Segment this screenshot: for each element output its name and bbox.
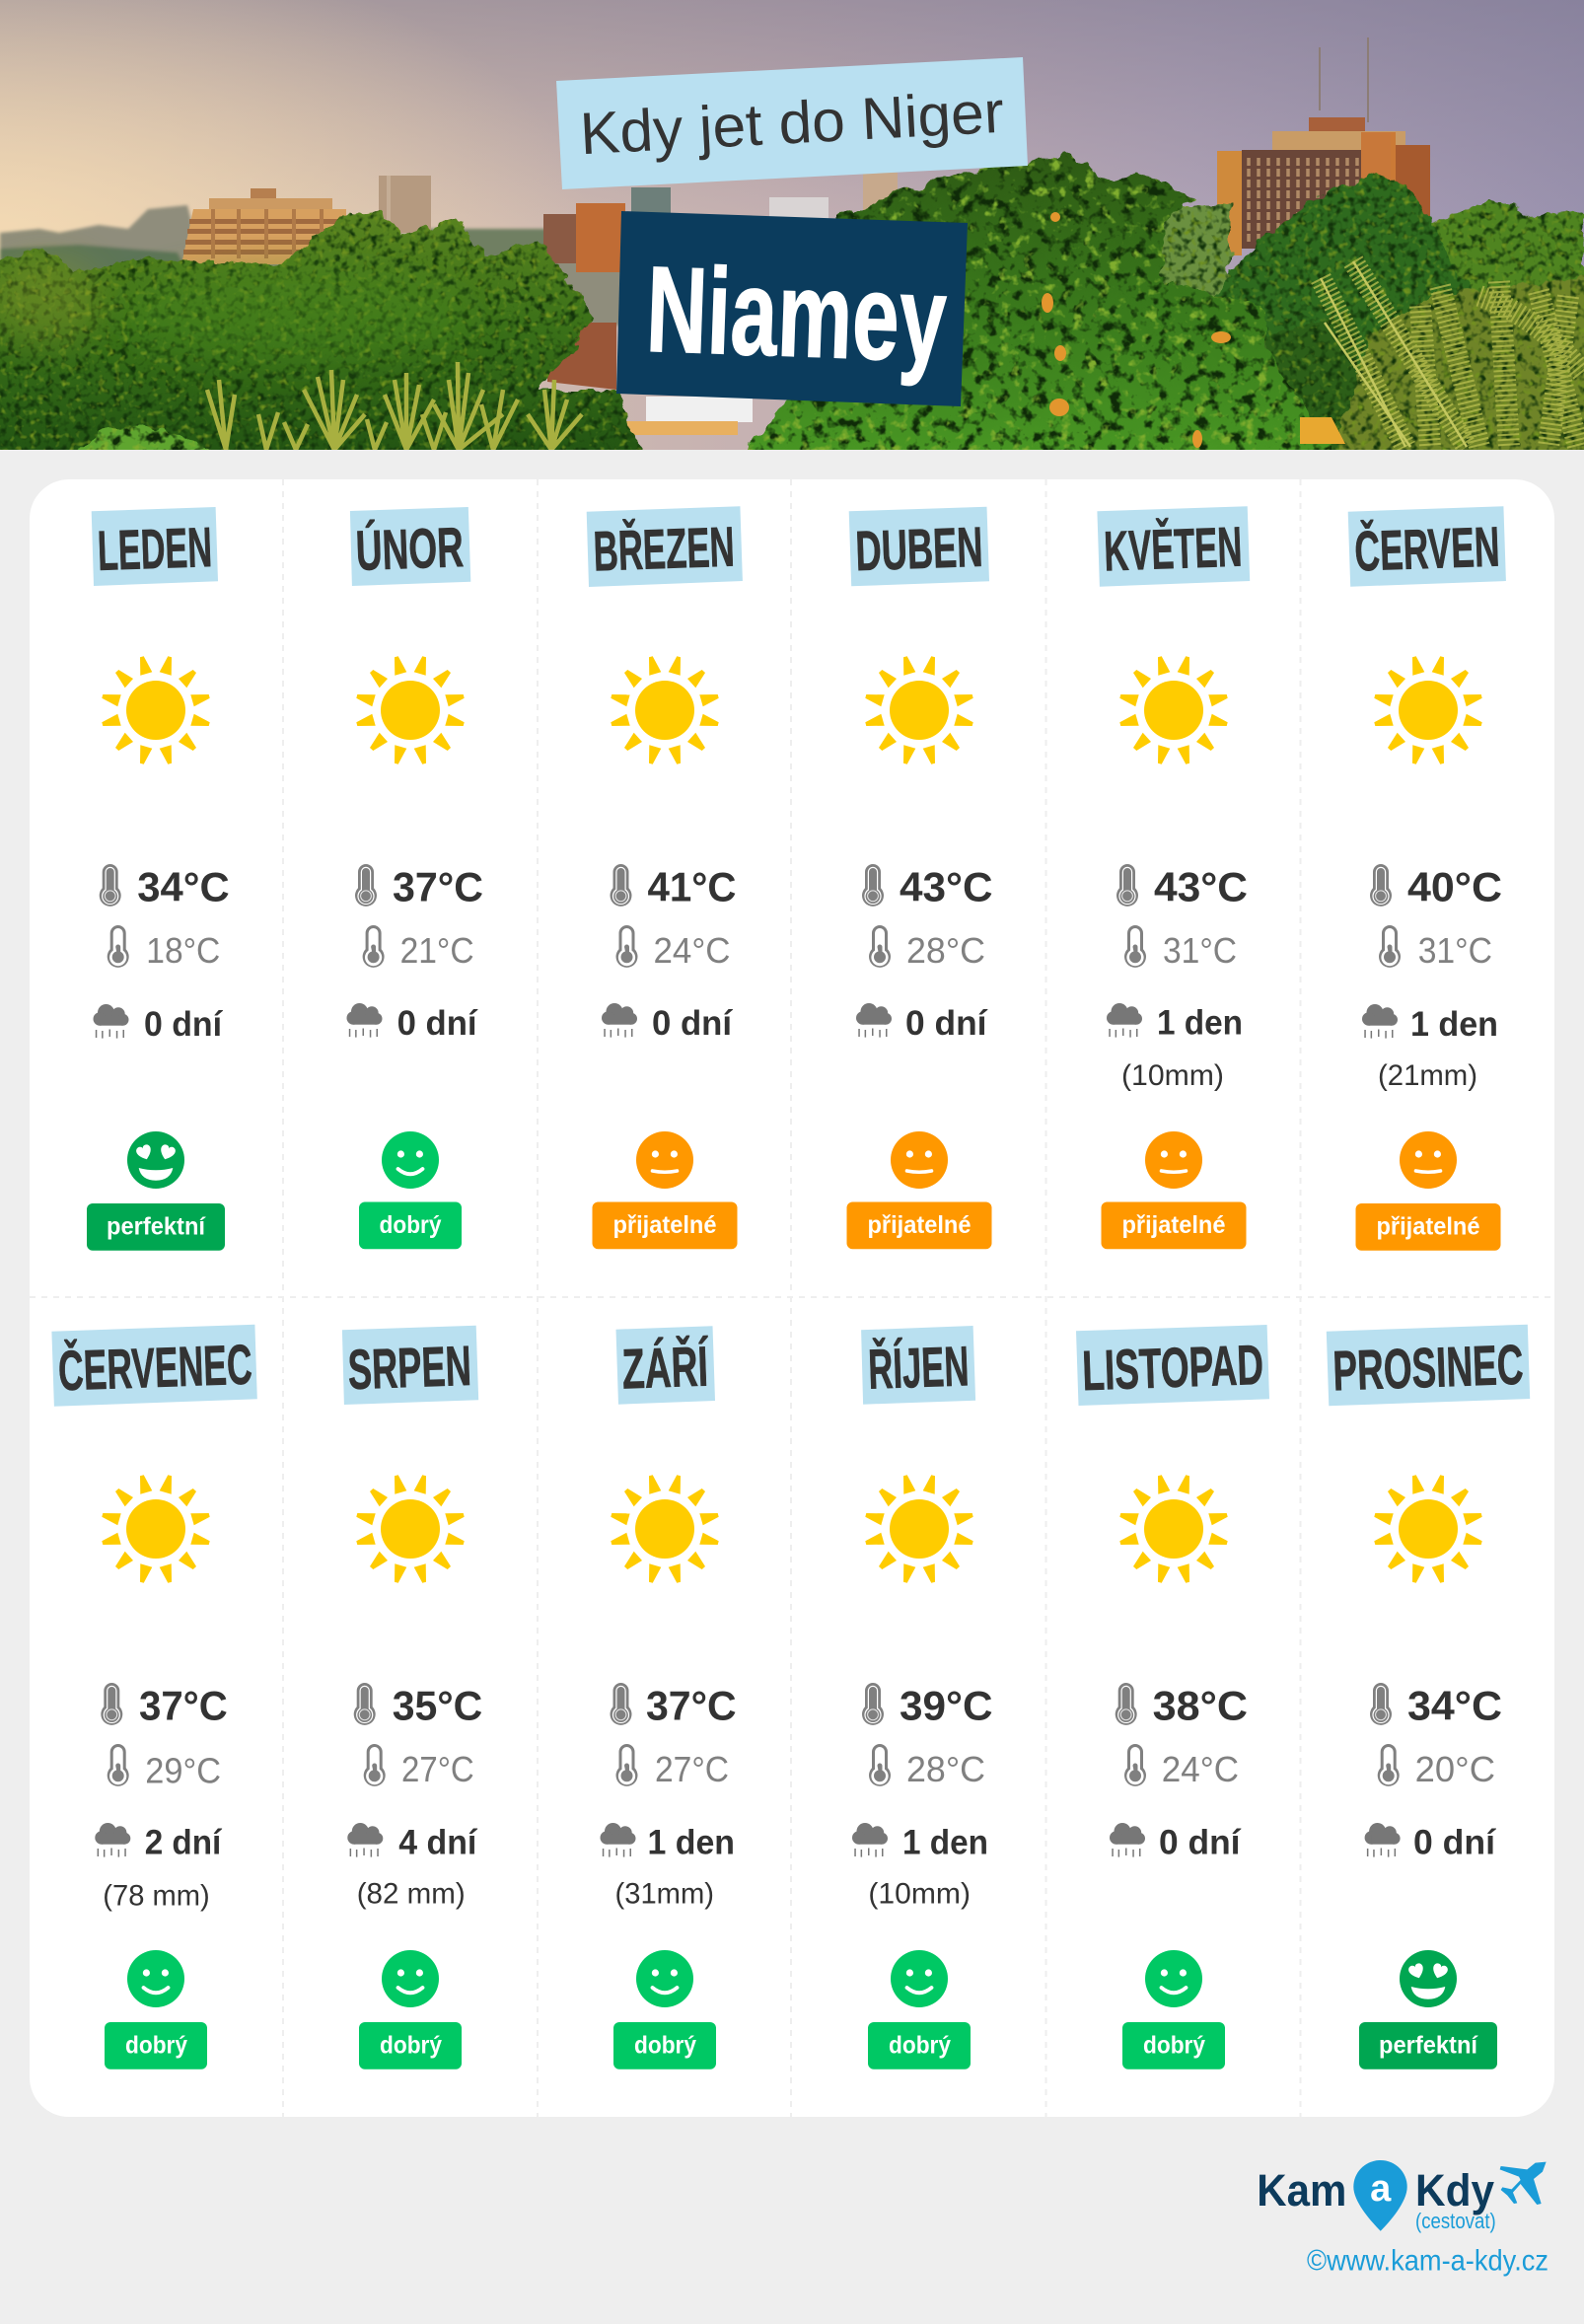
high temperature: 34°C <box>137 863 230 909</box>
rain days: 0 dní <box>905 1004 988 1043</box>
icon: airplane <box>1500 2162 1547 2205</box>
month: září <box>600 1326 737 2070</box>
low temperature <box>1124 925 1237 971</box>
low temperature: 24°C <box>1162 1749 1239 1789</box>
rain days: 0 dní <box>397 1004 478 1043</box>
low temperature <box>363 925 474 971</box>
low temperature: 28°C <box>906 930 985 971</box>
rain days <box>1107 1003 1243 1042</box>
rating: perfektní: perfektní <box>1379 2032 1478 2060</box>
label: listopad: LISTOPAD <box>1081 1334 1264 1403</box>
logo: Kam a Kdy: (cestovat) <box>1415 2209 1496 2233</box>
subtitle banner <box>556 57 1028 189</box>
month: únor <box>347 507 483 1249</box>
label: květen: KVĚTEN <box>1103 515 1243 583</box>
high temperature: 34°C <box>1407 1682 1502 1728</box>
rain days: 0 dní <box>144 1005 223 1044</box>
month: říjen <box>852 1326 992 2070</box>
label: červenec: ČERVENEC <box>57 1333 253 1403</box>
label: listopad <box>1076 1325 1269 1406</box>
label: říjen: ŘÍJEN <box>867 1334 970 1402</box>
rating: perfektní <box>1359 1950 1497 2070</box>
low temperature: 24°C <box>653 930 730 971</box>
rating: dobrý <box>105 1950 207 2070</box>
icon: sun <box>1119 656 1228 764</box>
rain days <box>347 1823 478 1862</box>
rain days <box>856 1003 988 1043</box>
rain amount: (78 mm) <box>103 1880 210 1913</box>
label: leden: LEDEN <box>97 516 213 583</box>
rating: dobrý: dobrý <box>125 2032 187 2060</box>
rain days <box>95 1823 222 1862</box>
high temperature: 38°C <box>1153 1682 1248 1728</box>
high temperature: 41°C <box>647 863 736 909</box>
high temperature: 37°C <box>139 1682 228 1728</box>
label: září <box>615 1326 715 1405</box>
month: červenec <box>51 1325 257 2070</box>
rain days: 2 dní <box>145 1823 222 1862</box>
low temperature: 31°C <box>1163 930 1237 971</box>
rain days: 0 dní <box>652 1004 733 1043</box>
month: leden <box>87 507 230 1251</box>
rain days: 1 den <box>647 1823 735 1862</box>
logo: Kam a Kdy <box>1257 2160 1547 2233</box>
month: prosinec <box>1327 1325 1530 2070</box>
low temperature <box>615 1744 729 1789</box>
rating: přijatelné: přijatelné <box>868 1211 972 1239</box>
rain amount: (31mm) <box>615 1878 714 1911</box>
rain days: 1 den <box>1410 1005 1498 1044</box>
rain days: 0 dní <box>1413 1823 1496 1862</box>
dark tree in front of tower <box>1213 173 1472 371</box>
low temperature <box>1379 925 1492 971</box>
rating: dobrý: dobrý <box>379 1211 442 1239</box>
far right tree <box>1431 199 1584 292</box>
low temperature: 20°C <box>1415 1749 1495 1789</box>
rain days <box>1365 1823 1496 1862</box>
month: červen <box>1348 506 1506 1251</box>
low temperature: 18°C <box>146 930 220 971</box>
month: březen <box>587 506 743 1249</box>
high temperature <box>101 1682 228 1728</box>
high temperature: 37°C <box>646 1682 737 1728</box>
icon: sun <box>1374 656 1482 764</box>
label: červen <box>1348 506 1506 587</box>
orange fruits <box>1042 212 1231 448</box>
icon: sun <box>356 656 465 764</box>
month: srpen <box>342 1326 482 2070</box>
low temperature: 28°C <box>906 1749 985 1789</box>
rating: dobrý: dobrý <box>889 2032 951 2060</box>
rating: přijatelné: přijatelné <box>1377 1213 1480 1241</box>
rating: dobrý <box>613 1950 716 2070</box>
rating: přijatelné <box>846 1131 992 1249</box>
rain days <box>602 1003 733 1043</box>
high temperature: 37°C <box>393 863 483 909</box>
label: leden <box>92 507 218 586</box>
title banner: Niamey <box>644 242 949 388</box>
logo: Kam a Kdy: Kdy <box>1415 2165 1494 2215</box>
low temperature: 27°C <box>401 1749 474 1789</box>
label: březen: BŘEZEN <box>593 515 736 583</box>
label: srpen <box>342 1326 478 1405</box>
label: květen <box>1097 506 1250 587</box>
bright grass left <box>207 362 582 450</box>
rating: přijatelné: přijatelné <box>613 1211 717 1239</box>
left tree mass <box>0 211 651 473</box>
white card panel <box>30 479 1554 2117</box>
label: únor <box>350 507 470 586</box>
icon: sun <box>865 1475 973 1583</box>
rain amount: (82 mm) <box>357 1878 466 1911</box>
high temperature: 40°C <box>1407 863 1502 909</box>
label: duben <box>849 507 989 586</box>
header photo: Niamey skyline <box>0 0 1584 473</box>
antennas <box>1320 37 1368 122</box>
rain days <box>347 1003 478 1043</box>
month: květen <box>1097 506 1250 1249</box>
rain days <box>852 1823 988 1862</box>
rating: přijatelné <box>1101 1131 1247 1249</box>
label: únor: ÚNOR <box>355 516 465 583</box>
icon: map pin <box>1353 2160 1407 2231</box>
label: březen <box>587 506 743 587</box>
high temperature <box>1116 1682 1248 1728</box>
center-right bush <box>728 154 1332 473</box>
rating: přijatelné: přijatelné <box>1122 1211 1226 1239</box>
icon: sun <box>102 1475 210 1583</box>
yellow roof <box>1300 417 1345 444</box>
rating: přijatelné <box>1355 1131 1501 1251</box>
high temperature: 39°C <box>900 1682 992 1728</box>
rating: perfektní: perfektní <box>107 1213 206 1241</box>
rating: dobrý <box>868 1950 971 2070</box>
rating: dobrý: dobrý <box>1143 2032 1205 2060</box>
low temperature <box>869 925 985 971</box>
icon: sun <box>356 1475 465 1583</box>
icon: sun <box>611 1475 719 1583</box>
low temperature <box>108 925 220 971</box>
rating: perfektní <box>87 1131 225 1251</box>
month: duben <box>846 507 992 1249</box>
high temperature: 43°C <box>1154 863 1248 909</box>
logo: Kam a Kdy: Kam <box>1257 2165 1346 2215</box>
icon: sun <box>1119 1475 1228 1583</box>
icon: sun <box>102 656 210 764</box>
title banner <box>616 211 968 406</box>
rain days: 4 dní <box>398 1823 478 1862</box>
label: říjen <box>861 1326 975 1405</box>
high temperature: 35°C <box>393 1682 482 1728</box>
rain days: 0 dní <box>1159 1823 1242 1862</box>
low temperature: 27°C <box>655 1749 729 1789</box>
label: duben: DUBEN <box>854 516 984 583</box>
rain days: 1 den <box>902 1823 988 1862</box>
low temperature: 29°C <box>145 1751 221 1791</box>
label: srpen: SRPEN <box>347 1335 472 1402</box>
high temperature <box>354 1682 482 1728</box>
low temperature: 21°C <box>400 930 474 971</box>
low temperature <box>1378 1744 1495 1789</box>
rating: dobrý <box>1122 1950 1225 2070</box>
rain amount: (21mm) <box>1378 1059 1477 1092</box>
rating: přijatelné <box>592 1131 738 1249</box>
rain amount: (10mm) <box>868 1878 971 1911</box>
rating: dobrý: dobrý <box>634 2032 696 2060</box>
low temperature <box>869 1744 985 1789</box>
label: září: ZÁŘÍ <box>621 1334 710 1402</box>
icon: sun <box>1374 1475 1482 1583</box>
low temperature <box>1124 1744 1239 1789</box>
low temperature <box>615 925 730 971</box>
rain days <box>1362 1004 1498 1044</box>
high temperature: 43°C <box>900 863 992 909</box>
rating: dobrý <box>359 1131 462 1249</box>
subtitle banner: Kdy jet do Niger <box>578 79 1005 167</box>
icon: sun <box>865 656 973 764</box>
high temperature <box>610 863 736 909</box>
rain days <box>1110 1823 1242 1862</box>
rain days <box>600 1823 735 1862</box>
label: červen: ČERVEN <box>1353 514 1501 584</box>
low temperature: 31°C <box>1418 930 1492 971</box>
icon: sun <box>611 656 719 764</box>
rating: dobrý: dobrý <box>380 2032 442 2060</box>
website credit: ©www.kam-a-kdy.cz <box>1307 2245 1548 2278</box>
icon: map pin: a <box>1370 2168 1392 2210</box>
palm fronds <box>1332 276 1584 464</box>
month: listopad <box>1076 1325 1269 2070</box>
rain days: 1 den <box>1157 1004 1243 1042</box>
low temperature <box>364 1744 474 1789</box>
low temperature <box>108 1744 221 1791</box>
label: červenec <box>51 1325 257 1407</box>
high temperature <box>355 863 483 909</box>
rating: dobrý <box>359 1950 462 2070</box>
rain amount: (10mm) <box>1121 1059 1224 1092</box>
rain days <box>93 1004 223 1044</box>
